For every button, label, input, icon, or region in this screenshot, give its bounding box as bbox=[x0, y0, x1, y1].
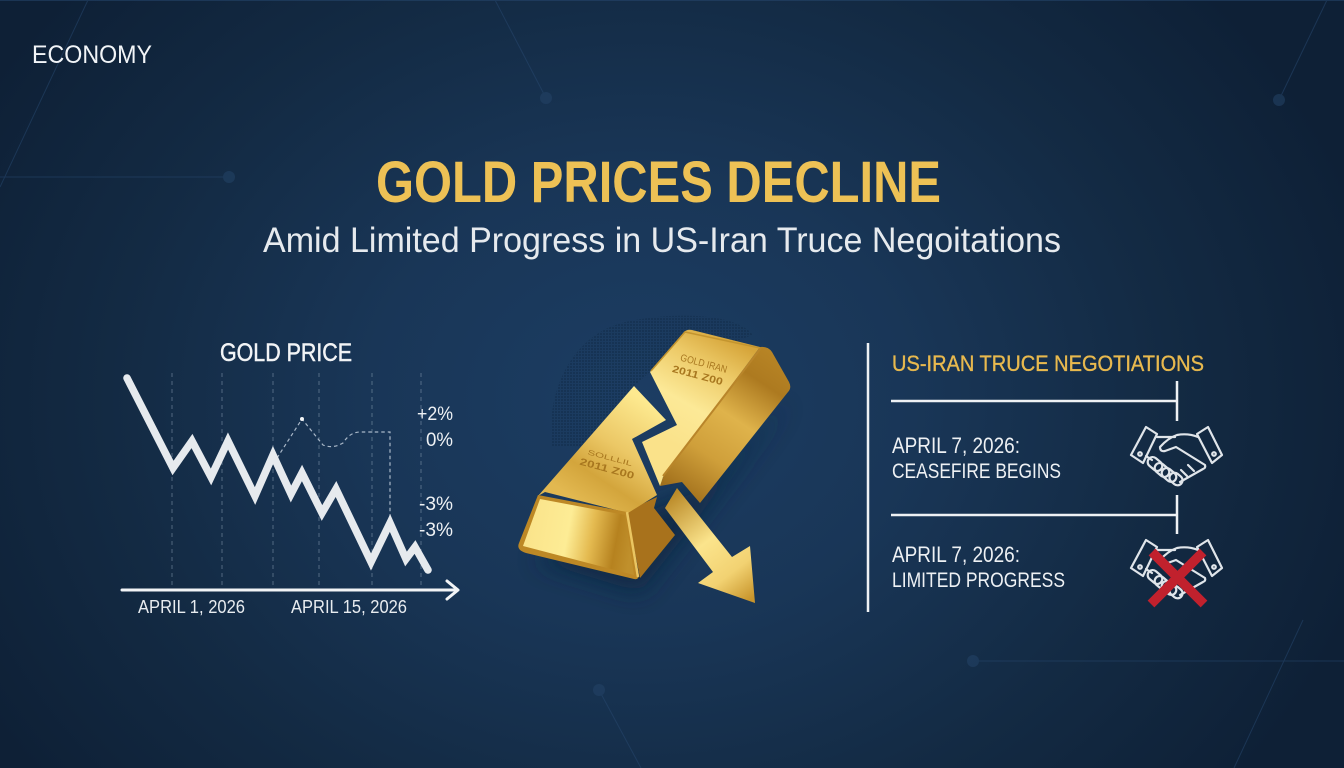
percentage scale: 0% bbox=[426, 430, 453, 451]
left bar fragment: top face bbox=[538, 386, 666, 513]
event two text: LIMITED PROGRESS bbox=[892, 569, 1065, 592]
bar drop shadow bbox=[535, 400, 790, 592]
left bar edge highlight bbox=[627, 512, 638, 577]
right bar top rim bbox=[651, 332, 760, 371]
axis label: end date: APRIL 15, 2026 bbox=[291, 596, 407, 617]
bar engraving: lower: 2011 Z00 bbox=[578, 457, 636, 482]
subtitle: Amid Limited Progress in US-Iran Truce Negoitations bbox=[263, 221, 1061, 260]
percentage scale bbox=[417, 404, 453, 541]
section label: ECONOMY bbox=[32, 41, 152, 69]
illustration: broken gold bar with down arrow bbox=[518, 316, 790, 603]
panel divider bbox=[867, 343, 869, 612]
bar engraving: lower bbox=[578, 448, 638, 482]
title: GOLD PRICES DECLINE bbox=[376, 150, 941, 215]
bar engraving: upper bbox=[671, 351, 728, 388]
event one text: CEASEFIRE BEGINS bbox=[892, 460, 1061, 483]
timeline marker one bbox=[891, 381, 1177, 421]
front face highlight bbox=[523, 499, 634, 575]
projection peak dot bbox=[300, 417, 304, 421]
percentage scale: -3% bbox=[419, 494, 453, 515]
left bar fragment: front face bbox=[518, 495, 639, 579]
time axis arrow bbox=[122, 581, 458, 599]
broken handshake outline bbox=[1131, 540, 1222, 600]
right bar edge highlight bbox=[663, 348, 761, 476]
arrow: falling bbox=[665, 488, 755, 603]
falling price line bbox=[127, 378, 428, 570]
red cross bbox=[1151, 552, 1204, 604]
percentage scale: -3% bbox=[419, 520, 453, 541]
percentage scale: +2% bbox=[417, 404, 453, 425]
axis label: start date: APRIL 1, 2026 bbox=[138, 596, 245, 617]
event one text: APRIL 7, 2026: bbox=[892, 433, 1020, 458]
timeline marker two bbox=[891, 495, 1177, 534]
event two text: APRIL 7, 2026: bbox=[892, 542, 1020, 567]
panel: truce negotiations timeline bbox=[868, 343, 1222, 612]
bar engraving: lower: SOLLLIL bbox=[587, 449, 633, 468]
bar engraving: upper: 2011 Z00 bbox=[671, 364, 724, 388]
halftone shadow dome bbox=[551, 316, 753, 447]
right bar fragment: top face bbox=[642, 330, 760, 486]
panel heading: US-IRAN TRUCE NEGOTIATIONS bbox=[892, 351, 1204, 376]
dashed projection line bbox=[277, 419, 390, 520]
icon: handshake crossed out bbox=[1131, 540, 1222, 604]
left bar fragment: side face bbox=[627, 497, 675, 578]
right bar fragment: side face bbox=[660, 347, 790, 503]
panel: gold price chart bbox=[122, 339, 458, 617]
icon: handshake bbox=[1131, 427, 1222, 487]
event two text bbox=[892, 542, 1065, 592]
bar engraving: upper: GOLD IRAN bbox=[679, 353, 728, 376]
chart heading: GOLD PRICE bbox=[220, 339, 352, 367]
event one text bbox=[892, 433, 1061, 483]
date gridlines bbox=[172, 373, 421, 590]
